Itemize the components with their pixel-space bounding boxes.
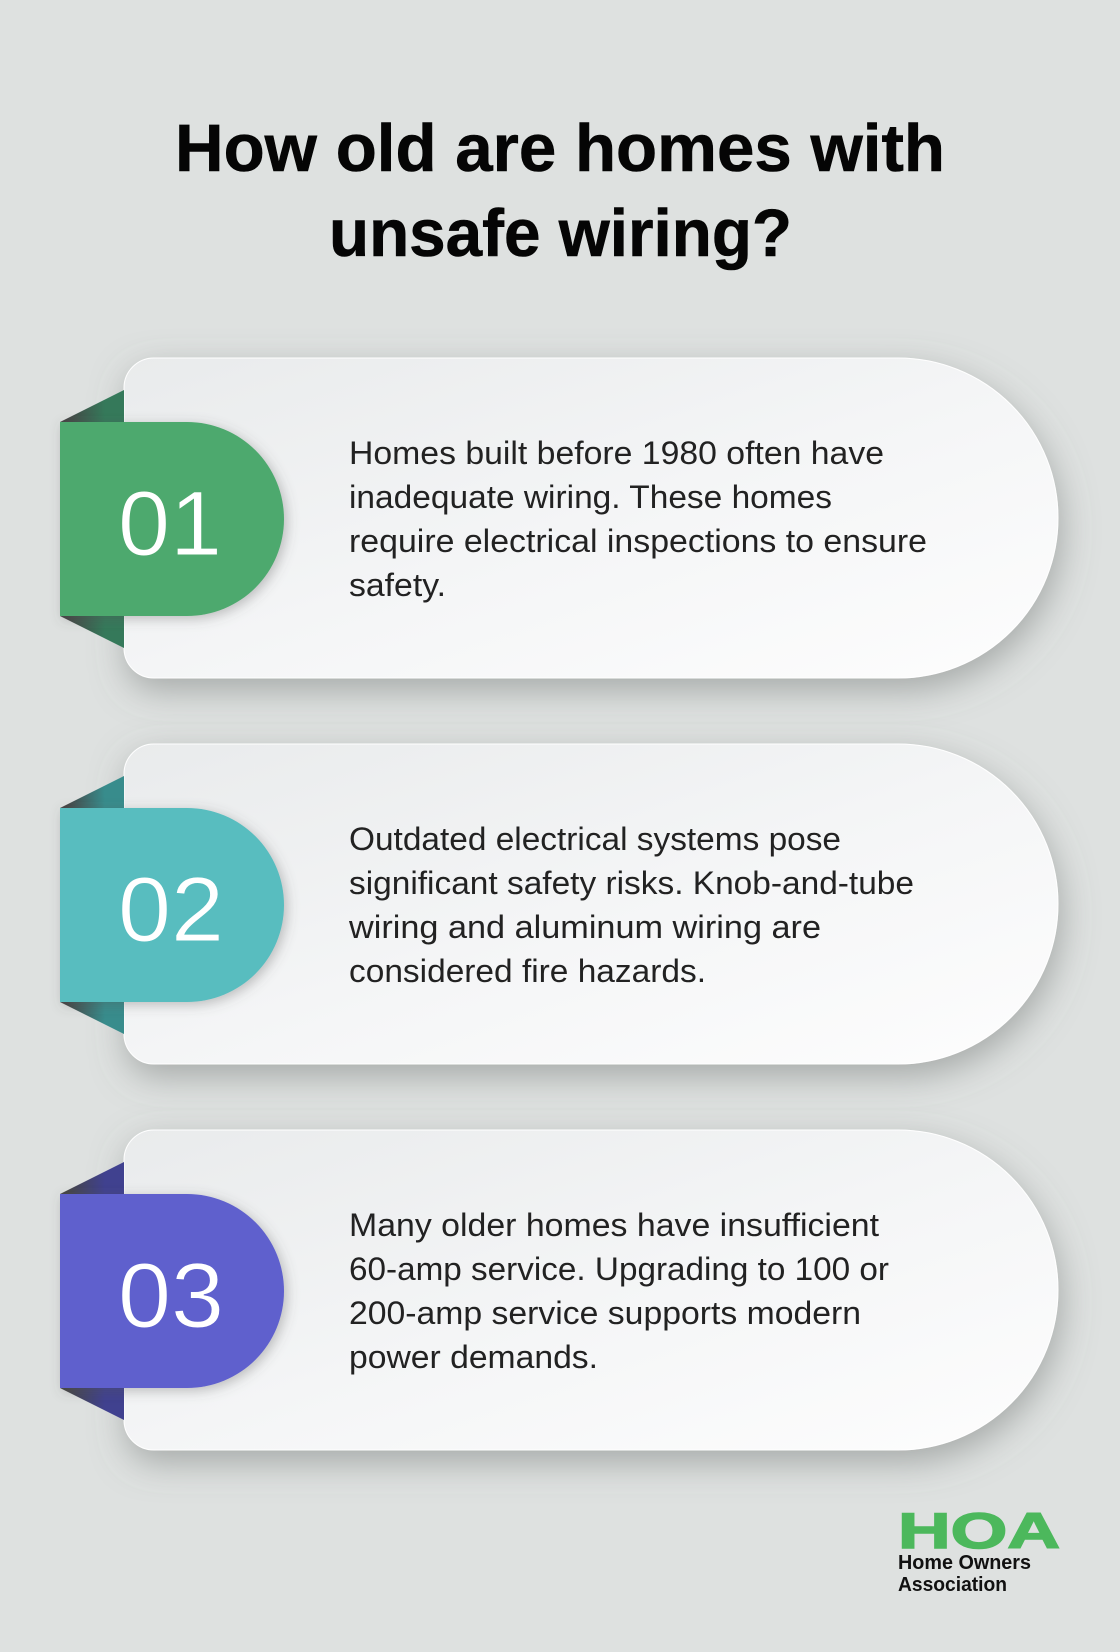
text block 02 xyxy=(348,821,914,989)
logo: HOA Home Owners Association xyxy=(898,1503,1060,1596)
text block 01 xyxy=(349,435,927,603)
title: How old are homes with xyxy=(175,111,945,186)
card background 03 xyxy=(124,1130,1058,1450)
panel: step 01 xyxy=(60,358,1058,678)
text block 03: Many older homes have insufficient xyxy=(349,1207,879,1243)
number 02: 02 xyxy=(118,859,224,961)
number badge 02 xyxy=(60,808,284,1002)
logo: HOA Home Owners Association: HOA xyxy=(898,1503,1060,1559)
text block 01: require electrical inspections to ensure xyxy=(349,523,927,559)
title: unsafe wiring? xyxy=(329,196,792,271)
text block 03 xyxy=(349,1207,889,1375)
panel: step 02 xyxy=(60,744,1058,1064)
number badge 01 xyxy=(60,422,284,616)
ribbon folds 02 xyxy=(60,776,124,1034)
logo: HOA Home Owners Association: Home Owners xyxy=(898,1552,1031,1574)
text block 01: Homes built before 1980 often have xyxy=(349,435,884,471)
text block 03: 200-amp service supports modern xyxy=(349,1295,861,1331)
text block 03: 60-amp service. Upgrading to 100 or xyxy=(349,1251,889,1287)
card background 02 xyxy=(124,744,1058,1064)
ribbon folds 03 xyxy=(60,1162,124,1420)
text block 02: Outdated electrical systems pose xyxy=(349,821,841,857)
logo: HOA Home Owners Association: Association xyxy=(898,1574,1007,1596)
number badge 03 xyxy=(60,1194,284,1388)
number 01: 01 xyxy=(118,473,222,575)
text block 02: significant safety risks. Knob-and-tube xyxy=(349,865,914,901)
text block 01: inadequate wiring. These homes xyxy=(349,479,832,515)
text block 01: safety. xyxy=(349,567,446,603)
panel: step 03 xyxy=(60,1130,1058,1450)
text block 03: power demands. xyxy=(349,1339,598,1375)
text block 02: considered fire hazards. xyxy=(349,953,706,989)
ribbon folds 01 xyxy=(60,390,124,648)
number 03: 03 xyxy=(118,1245,224,1347)
text block 02: wiring and aluminum wiring are xyxy=(348,909,821,945)
title xyxy=(175,111,945,271)
card background 01 xyxy=(124,358,1058,678)
